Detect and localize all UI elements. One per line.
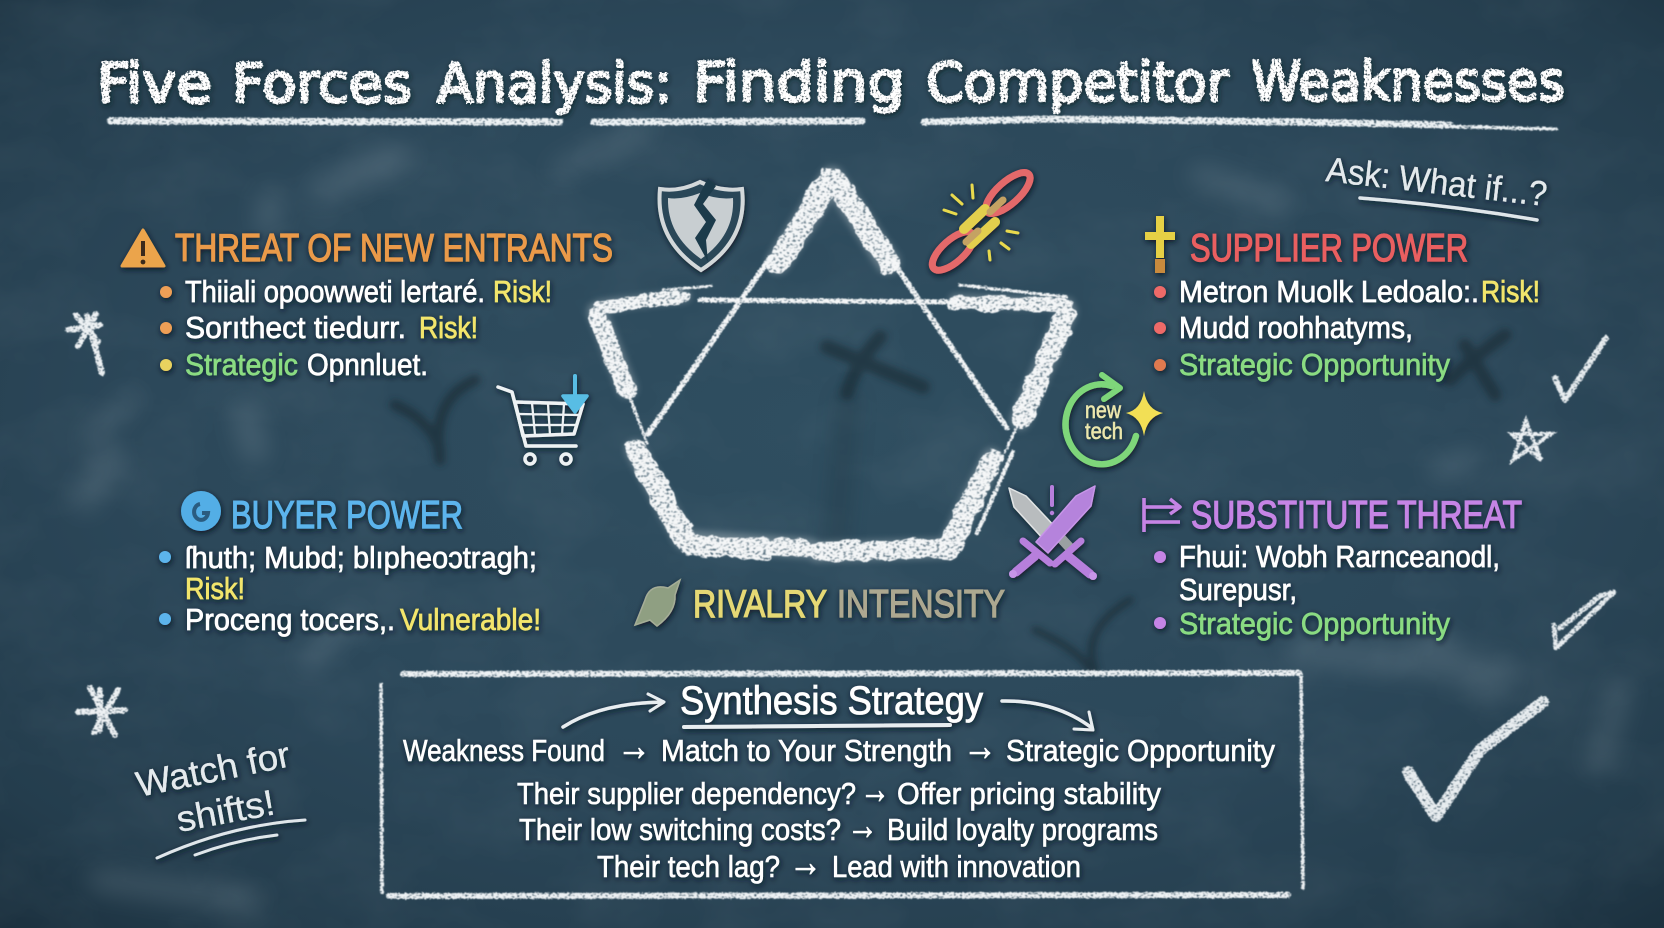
synthesis text: → xyxy=(860,765,890,812)
icon: shopping cart with down arrow xyxy=(498,376,587,464)
title: Competitor xyxy=(926,51,1230,114)
note: watch for shifts: shifts! xyxy=(173,782,278,840)
synthesis text: Weakness Found xyxy=(403,733,605,768)
bullet list: Opnnluet. xyxy=(307,347,428,382)
synthesis text: Their supplier dependency? xyxy=(517,776,856,811)
arrow: right swoosh xyxy=(1002,701,1093,730)
bullet list xyxy=(160,274,552,382)
panel: threat of new entrants xyxy=(122,227,613,382)
doodle: check mark middle right xyxy=(1554,592,1614,648)
title underline xyxy=(110,119,1556,129)
bullet list: Strategic xyxy=(185,347,298,382)
title: Analysis: xyxy=(437,52,672,115)
heading: SUPPLIER POWER xyxy=(1190,227,1468,270)
icon: swap arrows xyxy=(1144,498,1180,532)
panel: supplier power xyxy=(1145,216,1540,382)
note: watch for shifts xyxy=(132,734,305,858)
title: Weaknesses xyxy=(1251,50,1565,113)
note: ask what if: Ask: What if...? xyxy=(1324,150,1549,214)
bullet list: Risk! xyxy=(419,310,478,345)
title: Finding xyxy=(693,51,905,114)
bullet list: Risk! xyxy=(185,571,245,606)
icon: warning triangle xyxy=(122,230,164,266)
central five forces pentagon diagram xyxy=(597,178,1068,556)
synthesis text: → xyxy=(617,722,651,769)
bullet list: Fhɯi: Wobh Rarnceanodl, xyxy=(1179,539,1500,574)
synthesis text xyxy=(403,722,1275,885)
bullet list: Mudd roohhatyms, xyxy=(1179,310,1413,345)
title: Forces xyxy=(232,52,412,115)
arrow: left swoosh xyxy=(563,694,664,727)
heading: SUBSTITUTE THREAT xyxy=(1191,494,1522,537)
icon: breaking chain xyxy=(926,166,1036,277)
doodle: chalk star right xyxy=(1512,421,1551,460)
bullet list: Metron Muolk Ledoalo:. xyxy=(1179,274,1479,309)
icon: yellow cross xyxy=(1145,216,1175,273)
bullet list: Surepusr, xyxy=(1179,572,1297,607)
bullet list: Risk! xyxy=(1481,274,1540,309)
bullet list: Risk! xyxy=(493,274,552,309)
icon: new tech cycle: tech xyxy=(1085,418,1123,444)
synthesis text: Lead with innovation xyxy=(832,849,1081,884)
synthesis text: Offer pricing stability xyxy=(897,776,1161,811)
bullet list: Strategic Opportunity xyxy=(1179,606,1450,641)
panel: synthesis strategy xyxy=(381,673,1303,896)
synthesis text: Their tech lag? xyxy=(597,849,780,884)
panel: buyer power xyxy=(159,491,541,637)
synthesis text: → xyxy=(789,838,822,885)
heading: INTENSITY xyxy=(837,583,1005,626)
bullet list: Strategic Opportunity xyxy=(1179,347,1450,382)
doodle: chalk star lower left xyxy=(78,688,125,735)
panel: substitute threat xyxy=(1144,494,1522,641)
synthesis text: → xyxy=(963,722,997,769)
doodle: check mark upper right xyxy=(1555,338,1606,400)
bullet list xyxy=(159,540,541,637)
note: watch for shifts: Watch for xyxy=(132,734,293,805)
icon: new tech cycle: new xyxy=(1085,397,1121,423)
bullet list: Thiiali opoowweti lertaré. xyxy=(185,274,485,309)
heading: BUYER POWER xyxy=(231,494,463,537)
heading: Synthesis Strategy xyxy=(680,679,983,723)
bullet list: Proceng tocers,. xyxy=(185,602,395,637)
title xyxy=(97,50,1565,115)
bullet list: ſhuth; Mubd; blıpheoɔtragh; xyxy=(185,540,537,575)
synthesis text: Build loyalty programs xyxy=(887,812,1158,847)
box outline xyxy=(381,673,1303,896)
icon: blue circle xyxy=(181,491,221,531)
icon: leaf xyxy=(635,580,680,626)
doodle: chalk star left xyxy=(68,314,102,373)
icon: crossed swords xyxy=(1009,486,1097,580)
heading: THREAT OF NEW ENTRANTS xyxy=(175,227,613,270)
bullet list: Sorıthect tiedurr. xyxy=(185,310,406,345)
bullet list xyxy=(1154,274,1540,382)
panel: rivalry intensity xyxy=(635,580,1005,626)
heading xyxy=(693,583,1005,626)
bullet list xyxy=(1154,539,1500,641)
doodle: large check mark xyxy=(1408,702,1543,816)
synthesis text: Their low switching costs? xyxy=(519,812,841,847)
synthesis text: → xyxy=(847,801,878,848)
synthesis text: Match to Your Strength xyxy=(661,733,952,768)
bullet list: Vulnerable! xyxy=(400,602,541,637)
synthesis text: Strategic Opportunity xyxy=(1006,733,1275,768)
heading: RIVALRY xyxy=(693,583,827,626)
icon: broken shield xyxy=(660,178,743,270)
icon: new tech cycle xyxy=(1066,375,1163,464)
title: Five xyxy=(97,52,212,115)
